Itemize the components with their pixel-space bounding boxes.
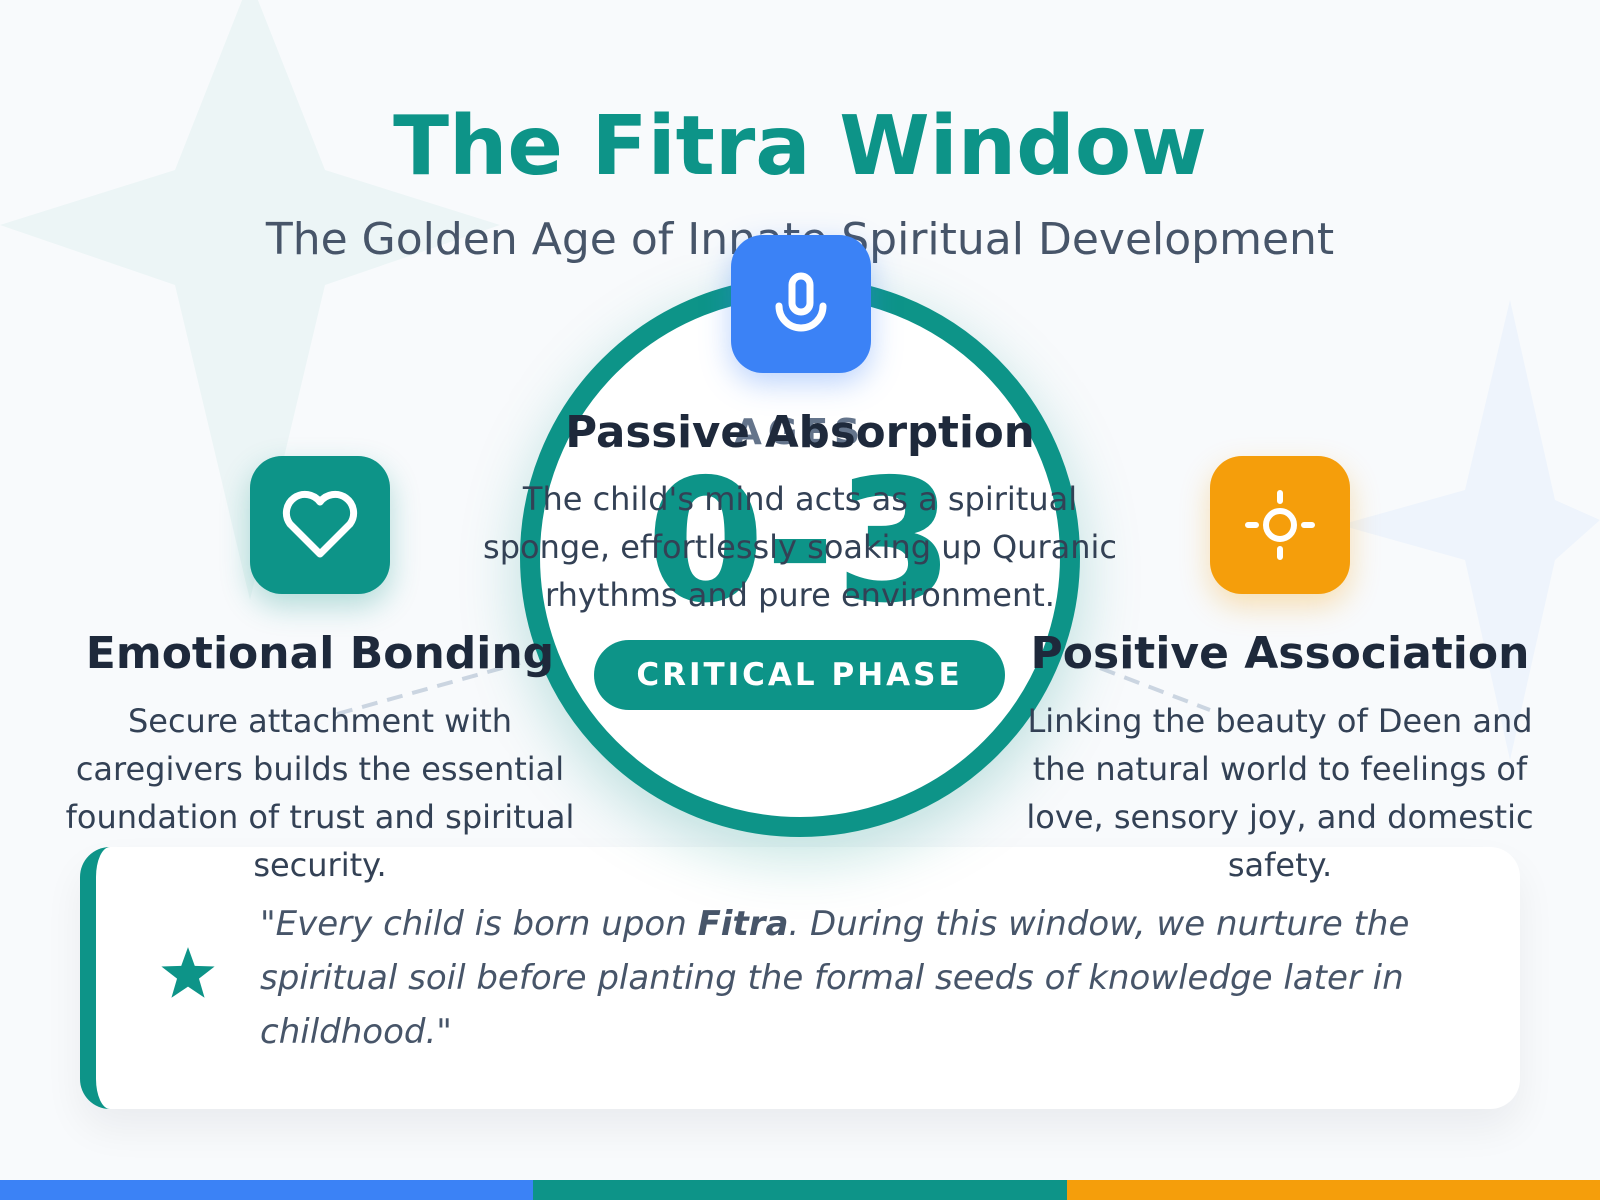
panel: emotional bonding: Emotional Bonding [86, 628, 554, 679]
panel: emotional bonding: security. [253, 846, 387, 884]
title: The Fitra Window [393, 99, 1207, 194]
ages label: AGES [734, 412, 866, 453]
panel: positive association: Linking the beauty of Deen and [1027, 702, 1533, 740]
panel: positive association: love, sensory joy, and domestic [1026, 798, 1534, 836]
subtitle: The Golden Age of Innate Spiritual Development [266, 214, 1334, 265]
icon: microphone [731, 235, 871, 373]
central text: passive absorption: sponge, effortlessly soaking up Quranic [483, 528, 1117, 566]
pill: critical phase [594, 640, 1005, 710]
icon: star [162, 947, 214, 998]
central circle [520, 277, 1080, 837]
central text: passive absorption [483, 408, 1117, 614]
panel: emotional bonding: Secure attachment with [128, 702, 512, 740]
quote text: "Every child is born upon Fitra. During this window, we nurture the spiritual soil before planting the formal seeds of knowledge later in childhood." [260, 904, 1409, 1052]
panel: emotional bonding: caregivers builds the essential [76, 750, 564, 788]
panel: positive association: the natural world to feelings of [1033, 750, 1527, 788]
quote card [80, 847, 1520, 1109]
central text: passive absorption: rhythms and pure environment. [545, 576, 1055, 614]
central text: passive absorption: The child's mind acts as a spiritual [523, 480, 1077, 518]
panel: emotional bonding [66, 628, 574, 884]
icon: sun [1210, 456, 1350, 594]
icon: heart [250, 456, 390, 594]
central text: passive absorption: Passive Absorption [565, 408, 1035, 458]
big number 0-3: 0-3 [646, 443, 954, 641]
panel: positive association [1026, 628, 1534, 884]
panel: positive association: Positive Association [1031, 628, 1529, 679]
bottom color bar [0, 1180, 1600, 1200]
panel: positive association: safety. [1228, 846, 1332, 884]
pill: critical phase: CRITICAL PHASE [636, 657, 963, 693]
panel: emotional bonding: foundation of trust and spiritual [66, 798, 574, 836]
